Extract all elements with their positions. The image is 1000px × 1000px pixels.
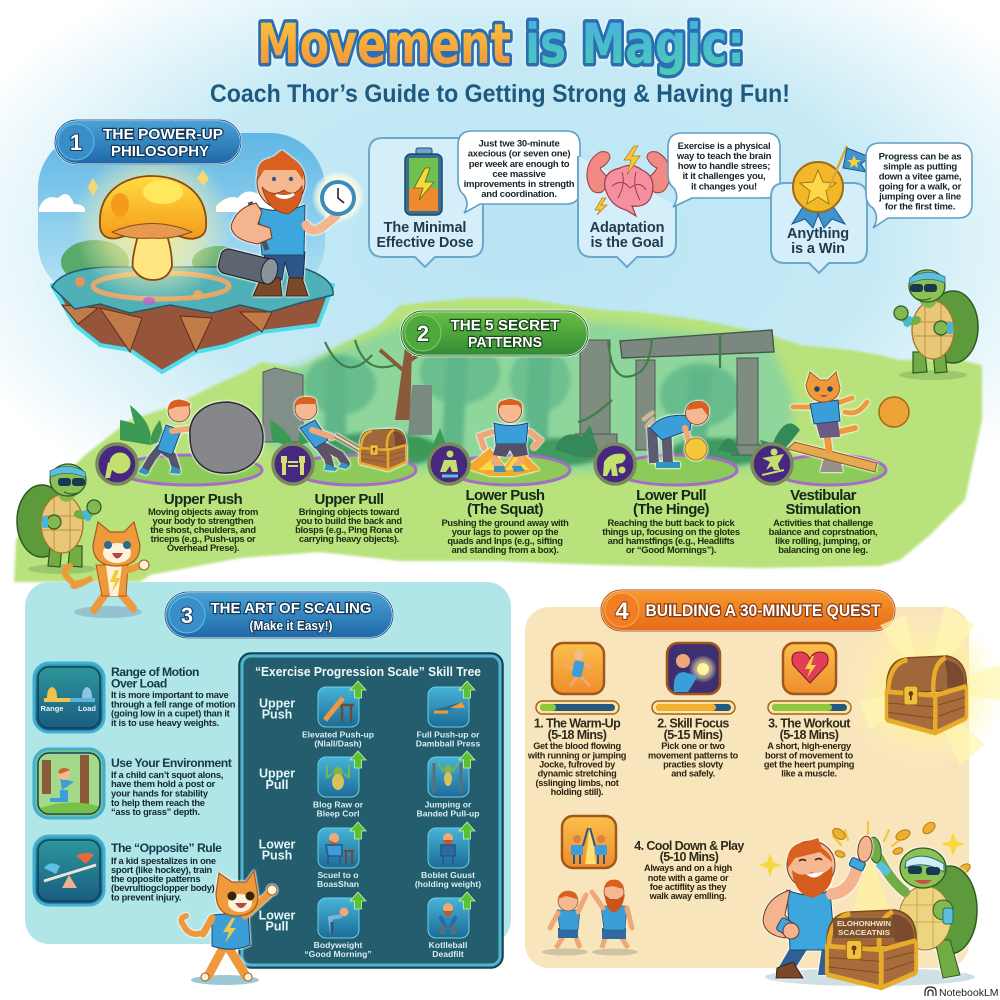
- quest step 3: workout: A short, high-energy: [767, 741, 852, 751]
- station: lower pull: and hamstfings (e.g., Headlifts: [608, 535, 734, 546]
- station: lower push: your lags to power op the: [452, 526, 558, 537]
- NotebookLM credit: NotebookLM: [939, 987, 999, 999]
- card: adaptation is the goal: is the Goal: [590, 235, 664, 251]
- station: upper push: Upper Push: [164, 491, 243, 508]
- icon: range and load slider: Range: [41, 704, 63, 713]
- figure: kid squatting with burst: [465, 400, 540, 476]
- row: lower pull: Deadfilt: [432, 949, 464, 959]
- station: upper push: the shost, cheulders, and: [150, 524, 256, 535]
- scaling tip: the opposite rule: If a kid spestalizes in one: [111, 856, 216, 866]
- station: vestibular stimulation: [752, 372, 909, 555]
- row: lower push: Lower: [259, 838, 296, 852]
- row: upper push: Upper: [259, 696, 295, 710]
- row: lower pull: Kotlleball: [429, 940, 467, 950]
- icon: battery: [405, 148, 442, 215]
- row: lower push: Push: [262, 848, 292, 862]
- quest step 4: cool down and play: [562, 816, 744, 901]
- station: upper pull: Bringing objects toward: [299, 506, 400, 517]
- figure: cat balancing on plank: [787, 372, 877, 472]
- quest step 3: workout: (5-18 Mins): [780, 728, 839, 742]
- card: anything is a win: Anything: [787, 226, 849, 242]
- scaling tip: the opposite rule: the opposite patterns: [111, 874, 200, 884]
- station: vestibular stimulation: Vestibular: [790, 487, 857, 504]
- station: vestibular stimulation: Stimulation: [785, 501, 861, 518]
- station: lower push: Pushing the ground away with: [441, 517, 569, 528]
- icon: lower push badge: [429, 444, 469, 484]
- row: upper push: Full Push-up or: [416, 730, 480, 740]
- quest step 4: cool down and play: note with a game or: [648, 873, 729, 883]
- station: upper push: your body to strengthen: [153, 515, 254, 526]
- icon: lower pull badge: [595, 444, 635, 484]
- speech bubble: minimal dose: per week are enough to: [469, 159, 570, 170]
- section 4 badge: [601, 590, 895, 631]
- speech bubble: adaptation: it it challenges you,: [683, 171, 765, 182]
- section 3 badge: (Make it Easy!): [250, 618, 332, 633]
- progress bar: [652, 701, 735, 714]
- chest on ground: SCACEATNIS: [838, 928, 890, 937]
- station: lower push: Lower Push: [465, 487, 545, 504]
- quest step 1: warm-up: (5-18 Mins): [548, 728, 607, 742]
- cat character: pointing: [181, 871, 277, 985]
- scaling tip: the opposite rule: [34, 836, 222, 905]
- icon: child holding tree: [34, 749, 104, 818]
- speech bubble: anything is a win: Progress can be as: [879, 152, 961, 162]
- man with clock and dumbbell: [217, 150, 364, 296]
- speech bubble: adaptation: how to handle strees;: [678, 161, 770, 172]
- quest step 1: warm-up: [527, 643, 626, 797]
- row: upper push: (Nlall/Dash): [314, 738, 362, 748]
- turtle character: top right: [894, 270, 978, 380]
- row: lower push: [259, 822, 481, 889]
- card: minimal effective dose: The Minimal: [384, 220, 466, 236]
- title: Movement: [257, 12, 511, 76]
- section 2 badge: THE 5 SECRET: [450, 317, 560, 334]
- speech bubble: anything is a win: jumping over a line: [878, 192, 961, 202]
- card: adaptation is the goal: [578, 146, 676, 267]
- section 1 illustration: floating island with power-up mushroom: [38, 133, 364, 372]
- row: upper pull: Upper: [259, 766, 295, 780]
- subtitle: Coach Thor’s Guide to Getting Strong & Having Fun!: [210, 80, 790, 108]
- section 1 badge: THE POWER-UP: [103, 126, 223, 143]
- progress bar: [768, 701, 851, 714]
- station: lower pull: [595, 401, 740, 555]
- station: lower pull: (The Hinge): [633, 501, 710, 518]
- section 2 badge: PATTERNS: [468, 334, 542, 351]
- station: upper pull: blosps (e.g., Ping Rona or: [295, 524, 404, 535]
- section 3 badge: 3: [181, 603, 193, 628]
- station: vestibular stimulation: balancing on one leg.: [778, 544, 868, 555]
- speech bubble: adaptation: [668, 133, 780, 207]
- row: upper pull: Jumping or: [425, 800, 472, 810]
- scaling tip: range of motion: It is more important to mave: [111, 690, 229, 700]
- row: upper push: Elevated Push-up: [302, 730, 374, 740]
- scaling tip: use your environment: If a child can’t squot alons,: [111, 770, 223, 780]
- section 2 green ground: [14, 298, 982, 582]
- card: adaptation is the goal: Adaptation: [590, 220, 664, 236]
- section 2 badge: 2: [417, 321, 429, 346]
- station: lower pull: Lower Pull: [636, 487, 706, 504]
- quest step 3: workout: borst of movement to: [765, 750, 854, 760]
- section 1 badge: PHILOSOPHY: [111, 143, 209, 160]
- icon: range and load slider: [34, 663, 104, 732]
- turtle character: left: [17, 464, 101, 574]
- icon: gold medal with flag: [792, 146, 870, 228]
- section 4 badge: BUILDING A 30-MINUTE QUEST: [646, 602, 880, 620]
- scaling tip: the opposite rule: sport (like hockey), train: [111, 865, 213, 875]
- row: upper push: Push: [262, 708, 292, 722]
- quest step 3: workout: 3. The Workout: [768, 716, 851, 730]
- row: lower push: Scuel to o: [317, 870, 359, 880]
- quest step 4: cool down and play: Always and on a high: [644, 863, 733, 873]
- quest step 1: warm-up: 1. The Warm-Up: [534, 716, 621, 730]
- quest step 1: warm-up: holding still).: [551, 787, 603, 797]
- quest step 4: cool down and play: (5-10 Mins): [660, 850, 719, 864]
- scaling tip: range of motion: Range of Motion: [111, 665, 199, 679]
- icon: two figures high five: [562, 816, 616, 868]
- icon: vestibular badge: [752, 444, 792, 484]
- row: lower push: BoasShan: [317, 879, 359, 889]
- mushroom: [88, 170, 209, 280]
- row: upper pull: [259, 751, 480, 818]
- station: lower push: quads and Inps (e.g., sifting: [447, 535, 563, 546]
- speech bubble: adaptation: Exercise is a physical: [678, 141, 770, 152]
- speech bubble: minimal dose: and coordination.: [481, 189, 557, 200]
- station: vestibular stimulation: like rolling, jumping, or: [775, 535, 871, 546]
- card: minimal effective dose: Effective Dose: [376, 235, 474, 251]
- icon: muscle brain: [587, 146, 670, 216]
- cat character: left: [64, 522, 149, 618]
- quest step 1: warm-up: Get the blood flowing: [533, 741, 621, 751]
- row: upper pull: Banded Pull-up: [416, 808, 480, 818]
- station: upper pull: you to build the back and: [296, 515, 402, 526]
- card: anything is a win: is a Win: [791, 241, 845, 257]
- station: lower pull: Reaching the butt back to pick: [608, 517, 736, 528]
- scaling tip: the opposite rule: to prevent injury.: [111, 892, 181, 902]
- quest step 2: skill focus: Pick one or two: [661, 741, 725, 751]
- figure: kid pushing boulder: [138, 400, 263, 475]
- quest step 1: warm-up: Jocke, fufroved by: [539, 760, 616, 770]
- scaling tip: range of motion: Over Load: [111, 676, 167, 690]
- station: upper pull: Upper Pull: [314, 491, 384, 508]
- section 4 panel: [525, 607, 969, 968]
- quest step 4: cool down and play: foe actiflity as they: [650, 882, 727, 892]
- figure: kid hinging with ball: [643, 401, 709, 468]
- scaling tip: the opposite rule: The “Opposite” Rule: [111, 841, 222, 855]
- quest step 3: workout: like a muscle.: [781, 768, 837, 778]
- quest step 1: warm-up: dynamic stretching: [538, 768, 616, 778]
- scaling tip: range of motion: (going low in a cupet) than it: [111, 708, 230, 718]
- icon: heart with lightning: [783, 643, 836, 694]
- row: upper push: Dambball Press: [416, 738, 480, 748]
- scaling tip: use your environment: have them hold a post or: [111, 779, 216, 789]
- station: lower pull: things up, focusing on the glotes: [602, 526, 740, 537]
- speech bubble: anything is a win: down a vitee game,: [879, 172, 961, 182]
- high five: coach, turtle and chest: [758, 820, 977, 988]
- quest step 1: warm-up: (sslinging limbs, not: [535, 778, 619, 788]
- icon: kid with glowing orb: [667, 643, 720, 694]
- turtle: [867, 836, 977, 978]
- scaling tip: range of motion: [34, 663, 236, 732]
- quest step 2: skill focus: and safely.: [671, 768, 715, 778]
- row: upper pull: Blog Raw or: [313, 800, 364, 810]
- progress bar: [536, 701, 619, 714]
- scaling tip: range of motion: through a fell range of motion: [111, 700, 236, 710]
- figures: kid and coach high five: [542, 880, 638, 956]
- quest step 4: cool down and play: walk away emlling.: [649, 891, 726, 901]
- station: upper push: triceps (e.g., Push-ups or: [151, 533, 256, 544]
- row: lower push: (holding weight): [415, 879, 481, 889]
- speech bubble: minimal dose: cee massive: [492, 169, 546, 180]
- coach: [763, 835, 874, 978]
- quest step 2: skill focus: 2. Skill Focus: [657, 716, 729, 730]
- icon: range and load slider: Load: [78, 704, 96, 713]
- quest step 2: skill focus: [648, 643, 739, 778]
- icon: running kid: [552, 643, 604, 694]
- speech bubble: minimal dose: Just twe 30-minute: [478, 138, 560, 150]
- scaling tip: use your environment: your hands for stability: [111, 788, 209, 798]
- station: lower pull: or “Good Mornings”).: [626, 544, 716, 555]
- station: vestibular stimulation: Activities that challenge: [773, 517, 873, 528]
- row: lower pull: Lower: [259, 908, 296, 922]
- icon: upper push badge: [97, 444, 137, 484]
- card: minimal effective dose: [369, 138, 483, 267]
- quest step 2: skill focus: (5-15 Mins): [664, 728, 723, 742]
- row: lower pull: Bodyweight: [314, 940, 362, 950]
- section 1 badge: [55, 120, 241, 164]
- figure: kid pulling chest: [294, 397, 406, 471]
- chest on ground: ELOHONHWIN: [837, 919, 891, 928]
- row: lower pull: Pull: [266, 920, 288, 934]
- row: upper pull: Bleep Corl: [317, 808, 359, 818]
- quest step 2: skill focus: practies slovty: [663, 760, 724, 770]
- speech bubble: minimal dose: axecious (or seven one): [468, 148, 570, 160]
- icon: ball: [879, 397, 909, 427]
- speech bubble: anything is a win: going for a walk, or: [879, 182, 962, 192]
- quest step 2: skill focus: movement patterns to: [648, 750, 739, 760]
- station: upper pull: [273, 397, 416, 544]
- section 3 panel: [25, 582, 511, 944]
- card: anything is a win: [771, 146, 870, 273]
- jungle scene with ruins: [120, 322, 800, 472]
- skill tree panel: [239, 653, 503, 968]
- row: lower push: Boblet Guust: [421, 870, 475, 880]
- speech bubble: minimal dose: [458, 131, 580, 213]
- speech bubble: adaptation: it changes you!: [691, 182, 757, 192]
- title: is Magic:: [525, 12, 745, 76]
- row: lower pull: “Good Morning”: [304, 949, 372, 959]
- speech bubble: anything is a win: [866, 143, 972, 228]
- scaling tip: the opposite rule: (bevrultiogclopper body): [111, 883, 215, 893]
- station: lower push: [429, 400, 570, 555]
- row: lower pull: [259, 892, 475, 959]
- skill tree panel: “Exercise Progression Scale” Skill Tree: [255, 665, 481, 679]
- row: upper push: [259, 681, 480, 748]
- speech bubble: anything is a win: for the first time.: [885, 202, 955, 212]
- icon: seesaw: [34, 836, 104, 905]
- station: upper push: [97, 400, 263, 553]
- station: lower push: (The Squat): [467, 501, 544, 518]
- scaling tip: range of motion: it is to use heavy weights.: [111, 718, 219, 728]
- station: vestibular stimulation: balance and coprstnation,: [769, 526, 877, 537]
- scaling tip: use your environment: “ass to grass” depth.: [111, 807, 200, 817]
- scaling tip: use your environment: Use Your Environment: [111, 756, 232, 770]
- station: upper push: Overhead Prese).: [167, 542, 239, 553]
- speech bubble: minimal dose: improvements in strength: [464, 179, 575, 190]
- scaling tip: use your environment: [34, 749, 232, 818]
- speech bubble: anything is a win: simple as putting: [883, 162, 957, 172]
- quest step 4: cool down and play: 4. Cool Down & Play: [634, 839, 744, 853]
- station: upper pull: carrying heavy objects).: [299, 533, 399, 544]
- station: upper push: Moving objects away from: [148, 506, 258, 517]
- treasure chest with glow: [845, 605, 1000, 770]
- section 3 badge: THE ART OF SCALING: [210, 600, 372, 617]
- quest step 1: warm-up: with running or jumping: [527, 750, 626, 760]
- row: upper pull: Pull: [266, 778, 288, 792]
- icon: upper pull badge: [273, 444, 313, 484]
- station: lower push: and standing from a box).: [451, 544, 559, 555]
- scaling tip: use your environment: to help them reach the: [111, 798, 205, 808]
- title: [257, 12, 745, 76]
- quest step 3: workout: get the heert pumping: [764, 760, 854, 770]
- section 3 badge: [165, 592, 393, 638]
- section 1 badge: 1: [70, 130, 82, 155]
- chest on ground: [827, 910, 916, 988]
- quest step 3: workout: [764, 643, 854, 778]
- section 4 badge: 4: [615, 598, 629, 625]
- section 2 badge: [401, 311, 588, 356]
- speech bubble: adaptation: way to teach the brain: [676, 151, 772, 162]
